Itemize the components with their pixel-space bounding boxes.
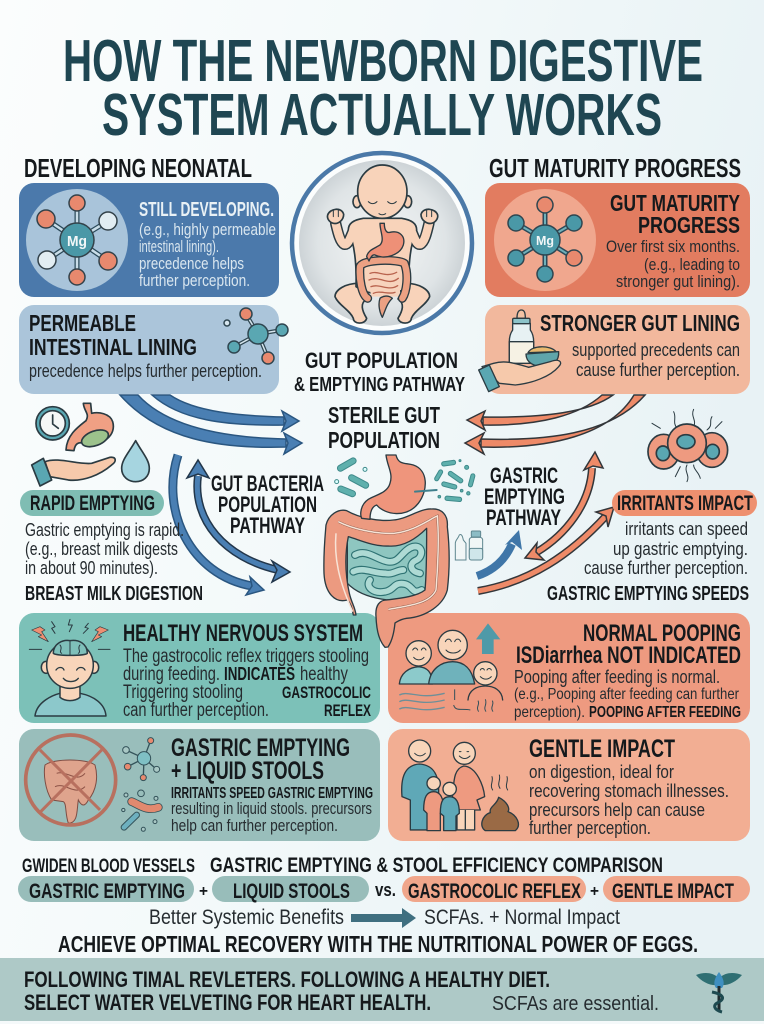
text: healthy nervous system: Triggering stooling: [123, 682, 243, 703]
text: healthy nervous system: REFLEX: [324, 701, 371, 720]
arrows: red gastric emptying pathway: [477, 452, 614, 591]
text: normal pooping: [514, 620, 741, 721]
text: still developing: precedence helps: [139, 254, 244, 273]
footer band: SELECT WATER VELVETING FOR HEART HEALTH.: [24, 990, 431, 1015]
label: gut population and emptying pathway: & EMPTYING PATHWAY: [294, 374, 465, 396]
label: gut bacteria population pathway: PATHWAY: [230, 513, 305, 538]
arrows: blue gut bacteria pathway: [173, 455, 290, 595]
text: rapid emptying body: (e.g., breast milk digests: [25, 538, 178, 559]
benefits line with arrow: [149, 906, 620, 929]
comparison headings: [22, 854, 663, 877]
comparison pills: +: [199, 883, 208, 900]
icon: Mg molecule red: [494, 189, 596, 291]
label: sterile gut population: [328, 402, 440, 453]
panel: still developing: [19, 183, 279, 297]
icon: irritated cells: [648, 409, 728, 482]
label: gut population and emptying pathway: GUT POPULATION: [305, 348, 458, 373]
text: gut maturity: stronger gut lining).: [616, 272, 740, 291]
comparison pills: GASTRIC EMPTYING: [29, 880, 185, 903]
label: gut bacteria population pathway: [211, 471, 324, 538]
comparison headings: GWIDEN BLOOD VESSELS: [22, 856, 195, 877]
text: healthy nervous system: GASTROCOLIC: [282, 683, 371, 702]
text: stronger gut lining: [540, 310, 740, 380]
footer band: [0, 958, 764, 1024]
footer band: FOLLOWING TIMAL REVLETERS. FOLLOWING A HEALTHY DIET.: [24, 967, 550, 992]
panel: stronger gut lining: [479, 305, 750, 394]
label: gastric emptying pathway: PATHWAY: [486, 505, 561, 530]
arrows: blue from permeable lining: [120, 395, 302, 454]
text: permeable intestinal lining: PERMEABLE: [29, 310, 136, 336]
text: still developing: STILL DEVELOPING.: [139, 199, 274, 221]
comparison pills: +: [590, 883, 599, 900]
text: still developing: intestinal lining).: [139, 237, 219, 256]
text: still developing: (e.g., highly permeable: [139, 220, 276, 239]
label: gut bacteria population pathway: POPULATION: [218, 492, 317, 517]
text: gut maturity: (e.g., leading to: [644, 255, 740, 274]
text: gentle impact: precursors help can cause: [529, 799, 705, 820]
icon: Mg molecule blue: [26, 189, 128, 291]
panel: healthy nervous system: [19, 613, 380, 723]
label: gastric emptying pathway: [484, 463, 565, 530]
icon: crossed-out intestines: [26, 735, 116, 825]
heading: developing neonatal: DEVELOPING NEONATAL: [24, 153, 252, 183]
text: healthy nervous system: healthy: [300, 664, 348, 685]
text: gastric emptying and liquid stools: [171, 734, 373, 835]
bacteria: [335, 457, 475, 502]
icon: small bottles: [455, 531, 483, 560]
comparison pills: GASTROCOLIC REFLEX: [408, 880, 581, 903]
text: irritants impact body: [584, 519, 748, 578]
label: sterile gut population: STERILE GUT: [328, 402, 440, 428]
text: gastric emptying and liquid stools: IRRITANTS SPEED GASTRIC EMPTYING: [171, 785, 373, 802]
benefits line with arrow: Better Systemic Benefits: [149, 906, 344, 929]
text: healthy nervous system: HEALTHY NERVOUS SYSTEM: [123, 620, 363, 647]
text: rapid emptying body: [25, 519, 184, 578]
label: gastric emptying pathway: EMPTYING: [484, 484, 565, 509]
comparison pills: LIQUID STOOLS: [233, 880, 350, 903]
text: gastric emptying and liquid stools: resulting in liquid stools. precursors: [171, 799, 372, 818]
label: sterile gut population: POPULATION: [328, 427, 440, 453]
comparison pills: vs.: [375, 880, 396, 900]
text: gentle impact: GENTLE IMPACT: [529, 735, 675, 763]
text: healthy nervous system: can further perception.: [123, 700, 269, 721]
text: permeable intestinal lining: [29, 310, 262, 381]
pill: rapid emptying: RAPID EMPTYING: [30, 492, 155, 515]
title: [63, 28, 703, 148]
text: still developing: further perception.: [139, 271, 250, 290]
text: normal pooping: perception).: [514, 704, 585, 721]
text: gastric emptying and liquid stools: + LIQUID STOOLS: [171, 757, 324, 785]
illustration: stomach and intestines: [324, 455, 475, 647]
text: healthy nervous system: INDICATES: [224, 664, 295, 684]
icon: family and stool: [402, 740, 518, 831]
panel: gentle impact: [388, 729, 750, 841]
text: permeable intestinal lining: precedence helps further perception.: [29, 361, 262, 381]
text: still developing: [139, 199, 276, 290]
small intestine: [347, 527, 427, 601]
stomach: [361, 455, 437, 519]
icon: clock, stomach, hand and droplet: [32, 403, 149, 486]
icon: small molecule: [224, 308, 288, 364]
text: gentle impact: further perception.: [529, 817, 651, 838]
text: gentle impact: [529, 735, 729, 838]
icon: Mg molecule blue: Mg: [67, 233, 87, 250]
panel: gastric emptying and liquid stools: [19, 729, 380, 841]
arrows: red from stronger gut lining: [465, 395, 645, 454]
panel: gut maturity: [485, 183, 750, 297]
text: gastric emptying and liquid stools: GASTRIC EMPTYING: [171, 734, 350, 762]
icon: Mg molecule red: Mg: [536, 233, 554, 248]
comparison pills: [18, 876, 750, 903]
icon: bottle and hand: [479, 310, 561, 392]
text: rapid emptying body: in about 90 minutes).: [25, 557, 158, 578]
panel: normal pooping: [388, 613, 750, 723]
icon: smiling family and up arrow: [399, 623, 503, 712]
text: healthy nervous system: [123, 620, 371, 721]
text: gut maturity: [606, 190, 740, 291]
text: gut maturity: Over first six months.: [606, 237, 740, 256]
text: healthy nervous system: The gastrocolic reflex triggers stooling: [123, 646, 369, 667]
footer band: SCFAs are essential.: [492, 993, 659, 1015]
label: gut population and emptying pathway: [294, 348, 465, 396]
text: rapid emptying body: Gastric emptying is rapid.: [25, 519, 184, 540]
benefits line with arrow: SCFAs. + Normal Impact: [424, 906, 620, 929]
icon: molecule and bacteria: [122, 738, 160, 831]
heading: breast milk digestion: BREAST MILK DIGESTION: [25, 583, 203, 605]
text: healthy nervous system: during feeding.: [123, 664, 220, 685]
pill: rapid emptying: [20, 490, 164, 516]
label: gastric emptying pathway: GASTRIC: [490, 463, 558, 488]
illustration: baby in circle: [292, 153, 472, 333]
panel: permeable intestinal lining: [19, 305, 288, 394]
label: gut bacteria population pathway: GUT BACTERIA: [211, 471, 324, 496]
text: permeable intestinal lining: INTESTINAL LINING: [29, 334, 197, 360]
colon: [324, 509, 449, 647]
text: gentle impact: on digestion, ideal for: [529, 761, 674, 782]
icon: smiling head with brain: [29, 619, 110, 716]
text: gastric emptying and liquid stools: help can further perception.: [171, 816, 338, 835]
icon: caduceus: [696, 972, 742, 1012]
